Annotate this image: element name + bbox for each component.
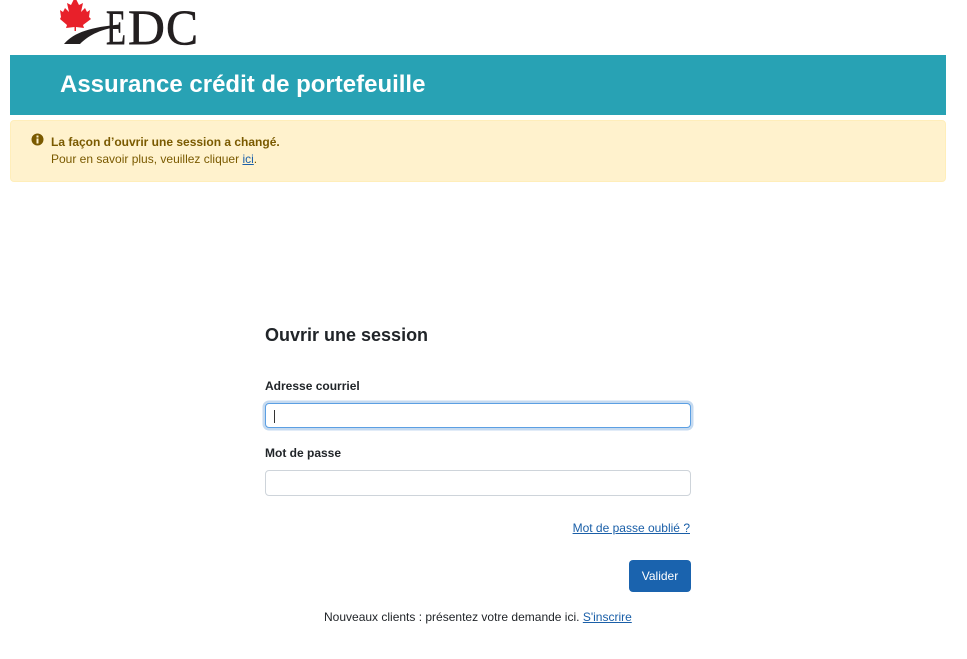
link: forgot password: Mot de passe oublié ? (573, 521, 690, 535)
input: password (265, 470, 691, 496)
logo: EDC with maple leaf (60, 0, 198, 50)
label: email: Adresse courriel (265, 379, 360, 393)
label: password: Mot de passe (265, 446, 341, 460)
alert heading: La façon d’ouvrir une session a changé. (51, 135, 280, 149)
button: submit (629, 560, 691, 592)
button: submit: Valider (642, 569, 678, 583)
icon: red maple leaf (60, 0, 91, 31)
form heading: Ouvrir une session (265, 325, 428, 345)
icon: info circle (32, 134, 44, 146)
logo wordmark (106, 0, 198, 55)
banner title: Assurance crédit de portefeuille (60, 71, 425, 98)
alert panel (10, 120, 946, 182)
input: email focused (265, 403, 691, 428)
signup line: Nouveaux clients : présentez votre demande ici. S'inscrire (324, 610, 632, 624)
text cursor (274, 410, 275, 423)
alert text: Pour en savoir plus, veuillez cliquer ici. (51, 152, 257, 166)
header banner (10, 55, 946, 115)
icon: black swoosh (64, 24, 120, 44)
